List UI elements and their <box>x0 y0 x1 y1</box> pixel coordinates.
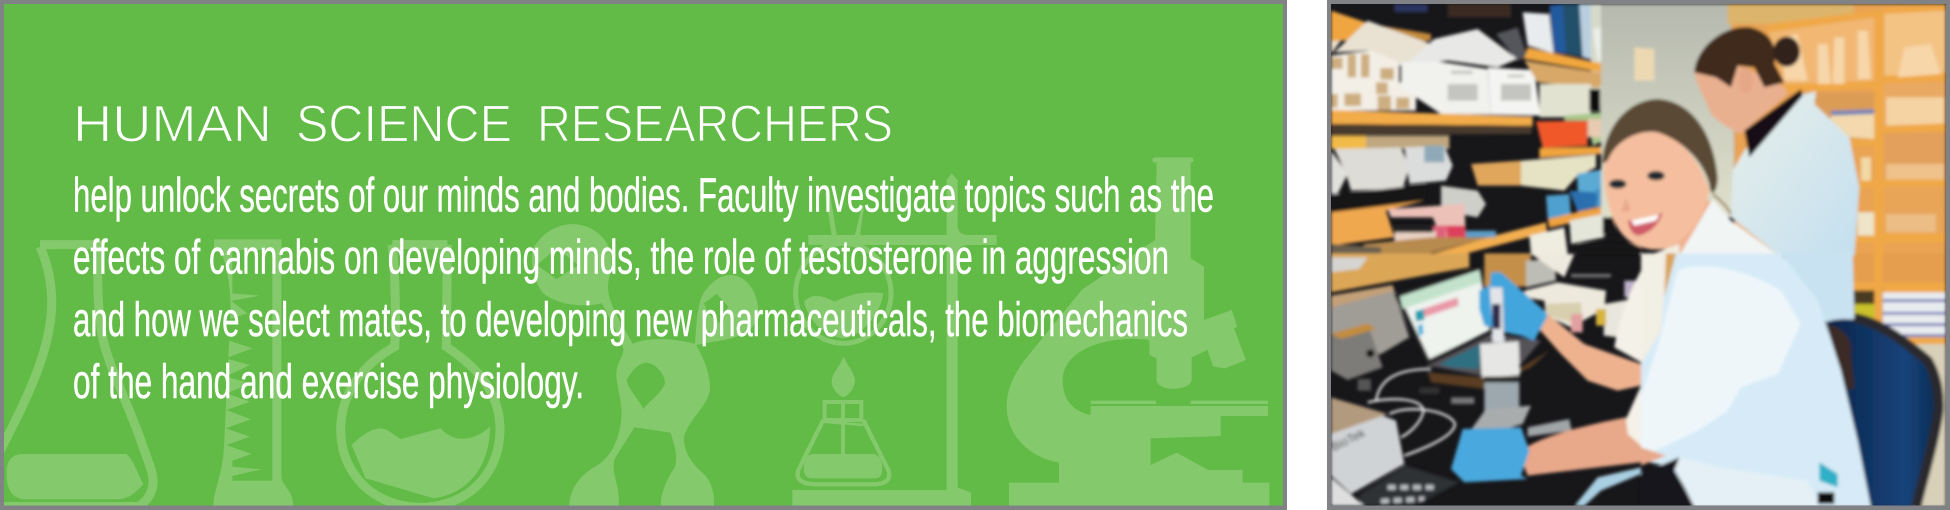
body text: and how we select mates, to developing new pharmaceuticals, the biomechanics <box>73 294 1188 347</box>
plate reader <box>1331 414 1407 496</box>
body text: effects of cannabis on developing minds, the role of testosterone in aggression <box>73 232 1169 284</box>
icon: ring stand with flask <box>792 173 997 507</box>
woman in lab coat <box>1602 99 1871 507</box>
body text: of the hand and exercise physiology. <box>73 356 584 409</box>
panel: green text panel <box>0 0 1287 510</box>
blue chair <box>1826 318 1939 507</box>
icon: molecule model <box>532 224 758 508</box>
icon: round flask <box>341 245 500 507</box>
icon: burner flask with flame <box>798 357 889 484</box>
heading: SCIENCE <box>296 96 512 154</box>
device brand label: BioTek <box>1329 425 1368 454</box>
icon: erlenmeyer flask <box>1 245 153 505</box>
wall and right hand cabinet <box>1601 4 1946 254</box>
lab glassware watermark <box>1 157 1269 508</box>
laptop <box>1394 267 1491 366</box>
heading <box>73 96 893 154</box>
heading: HUMAN <box>73 96 272 154</box>
lower left bench with equipment <box>1329 253 1641 506</box>
icon: microscope <box>1007 157 1269 507</box>
body text <box>73 170 1214 409</box>
panel: photo of researchers in lab <box>1327 0 1950 510</box>
lower right cabinet chair back and floor <box>1849 253 1946 507</box>
heading: RESEARCHERS <box>537 96 893 154</box>
upper left shelves and supplies <box>1331 4 1641 254</box>
blue gloves and forearms <box>1536 314 1641 391</box>
bench device <box>1331 324 1383 380</box>
man in lab coat <box>1694 27 1859 322</box>
icon: graduated cylinder <box>213 239 293 507</box>
multichannel pipette <box>1488 286 1504 342</box>
woman's head <box>1604 132 1709 250</box>
body text: help unlock secrets of our minds and bodies. Faculty investigate topics such as the <box>73 170 1214 222</box>
